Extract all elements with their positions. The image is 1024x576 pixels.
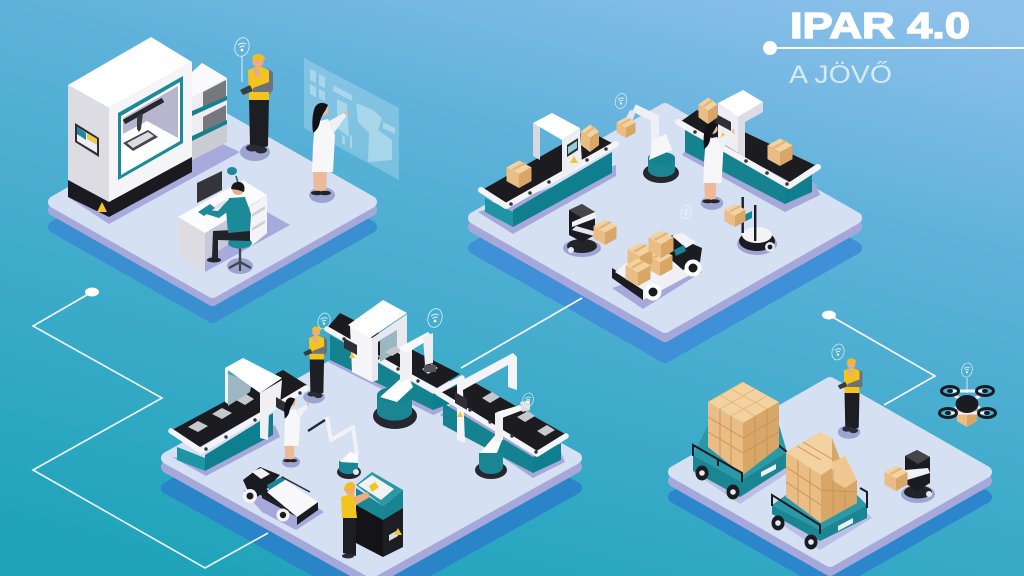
platform slab (54, 112, 371, 300)
panel: logistics platform (474, 90, 856, 336)
label (761, 464, 776, 477)
box pallet (708, 382, 779, 475)
panel: assembly line platform (167, 300, 576, 576)
server cabinet (192, 63, 227, 160)
platform slab (474, 109, 856, 336)
scientist at display (309, 103, 348, 203)
control panel (75, 123, 99, 157)
black delivery robot (884, 450, 935, 503)
gate (716, 90, 763, 158)
wifi icon (614, 92, 628, 110)
loaded cart one (693, 382, 792, 504)
boxes (506, 124, 599, 188)
gate (225, 358, 288, 440)
robot arm with box (614, 92, 679, 183)
wifi icon (830, 343, 846, 361)
lift robot with box (724, 197, 777, 255)
box (594, 220, 616, 245)
right conveyor (678, 90, 820, 212)
wheels (696, 466, 740, 500)
platform slab (674, 383, 986, 570)
flat autonomous cart (243, 467, 324, 530)
large robot arm (373, 332, 436, 429)
wheels (772, 516, 818, 550)
title dot and rule (763, 41, 1024, 55)
delivery drone (940, 362, 996, 427)
boxes (698, 98, 792, 166)
panel: warehouse platform (674, 343, 996, 570)
holographic panel (304, 58, 399, 180)
wifi icon (680, 204, 692, 220)
title (763, 5, 1024, 89)
technician in white coat (282, 398, 309, 468)
rail and print head (123, 100, 163, 151)
engineer with tablet (233, 36, 273, 161)
subtitle: A JÖVŐ (789, 60, 892, 89)
gate (344, 300, 407, 382)
worker with remote (830, 343, 862, 439)
supervisor with tablet (303, 312, 332, 403)
platform shadows (54, 137, 986, 576)
technician in white coat (701, 123, 735, 210)
platform slab (167, 344, 576, 576)
wifi icon (521, 392, 535, 408)
right conveyor (438, 353, 567, 478)
box (884, 466, 908, 491)
gantry (455, 353, 517, 443)
black delivery robot (563, 204, 616, 257)
carried box (616, 117, 636, 138)
rear conveyor (327, 300, 465, 415)
wifi icon (426, 307, 444, 329)
left conveyor (171, 358, 307, 476)
warning sign (97, 202, 107, 212)
wifi icon (316, 312, 332, 330)
parts on belt (385, 346, 438, 374)
operator at console (341, 482, 370, 558)
box stack (626, 230, 674, 286)
rail (693, 445, 742, 482)
desk lamp (227, 167, 240, 190)
seated operator and chair (206, 182, 253, 274)
panel: design room platform (54, 36, 399, 300)
small welding arm (308, 417, 361, 479)
label (838, 518, 853, 531)
connector lines (33, 288, 935, 568)
keyboard and mat (198, 200, 228, 216)
autonomous cart with boxes (612, 204, 702, 309)
floor shadow of machines (68, 130, 240, 224)
rail (772, 488, 867, 534)
monitor (197, 171, 222, 203)
title text: IPAR 4.0 (790, 5, 970, 46)
big machine (68, 37, 192, 217)
wifi icon (960, 362, 974, 393)
loaded cart two (772, 432, 872, 550)
office desk (178, 167, 290, 274)
box (724, 204, 746, 227)
control station (341, 472, 403, 558)
wifi icon (233, 36, 251, 82)
box stack (786, 432, 857, 523)
gate (533, 113, 582, 177)
right robot arm (475, 392, 535, 479)
left conveyor (478, 113, 616, 234)
